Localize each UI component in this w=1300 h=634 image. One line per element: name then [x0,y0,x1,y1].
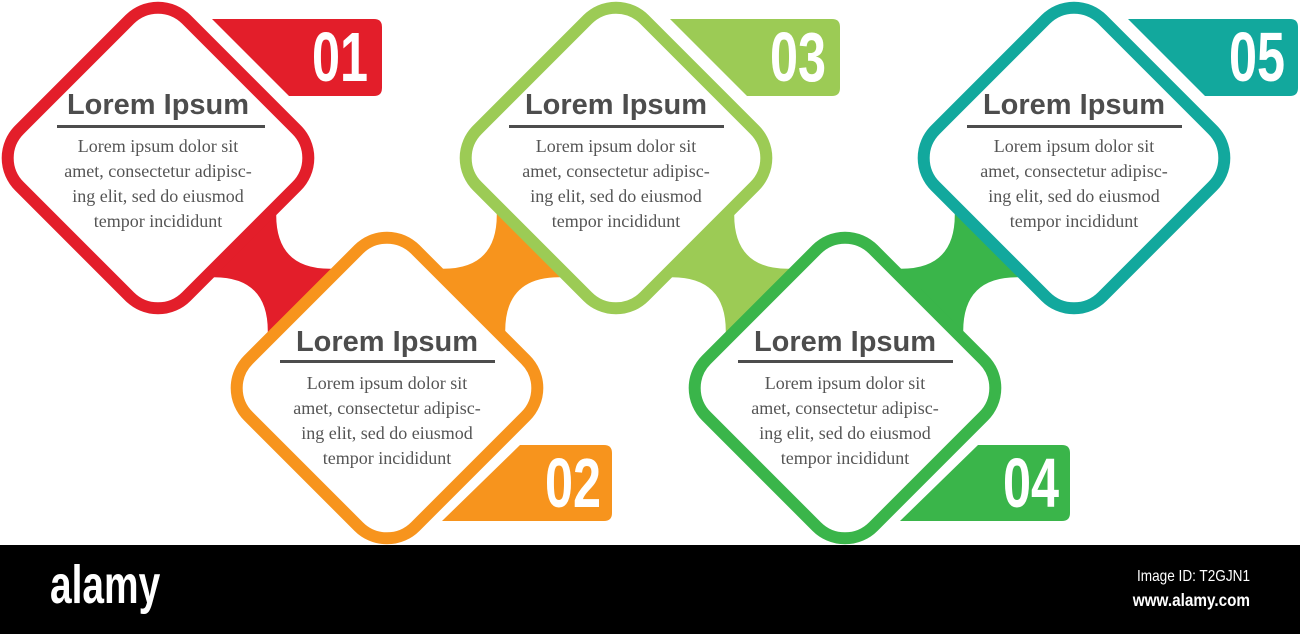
footer image id: Image ID: T2GJN1 [1137,568,1250,585]
diamond 1: Lorem ipsum dolor sit [78,136,238,156]
diamond 2: Lorem ipsum dolor sit [307,373,467,393]
diamond 4: ing elit, sed do eiusmod [759,423,931,443]
diamond 5 [907,0,1241,325]
tab 04: 04 [1003,444,1059,522]
diamond 5: amet, consectetur adipisc- [980,161,1168,181]
connector 4-5 [891,205,1027,341]
diamond 3: Lorem Ipsum [525,89,707,121]
diamond 2 [220,221,554,555]
diamond 4: Lorem ipsum dolor sit [765,373,925,393]
diamond 4: amet, consectetur adipisc- [751,398,939,418]
diamond 5: Lorem ipsum dolor sit [994,136,1154,156]
diamond 1: tempor incididunt [94,211,222,231]
footer url: www.alamy.com [1132,590,1250,610]
diamond 3: Lorem ipsum dolor sit [536,136,696,156]
diamond 5: Lorem Ipsum [983,89,1165,121]
diamond 4: Lorem Ipsum [754,326,936,358]
diamond 3 [449,0,783,325]
diamond 5: tempor incididunt [1010,211,1138,231]
diamond 3: amet, consectetur adipisc- [522,161,710,181]
tab 03: 03 [770,18,826,96]
tab 02 [442,444,612,522]
diamond 3: ing elit, sed do eiusmod [530,186,702,206]
tab 03 [670,18,840,96]
diamond 2: amet, consectetur adipisc- [293,398,481,418]
diamond 4 [678,221,1012,555]
connector 1-2 [204,205,340,341]
diamond 2: tempor incididunt [323,448,451,468]
diamond 2: Lorem Ipsum [296,326,478,358]
diamond 1: amet, consectetur adipisc- [64,161,252,181]
diamond 2: ing elit, sed do eiusmod [301,423,473,443]
tab 05 [1128,18,1298,96]
tab 02: 02 [545,444,601,522]
tab 01: 01 [312,18,368,96]
footer logo: alamy [50,554,160,614]
footer bar [0,545,1300,634]
tab 04 [900,444,1070,522]
diamond 3: tempor incididunt [552,211,680,231]
diamond 1 [0,0,325,325]
diamond 5: ing elit, sed do eiusmod [988,186,1160,206]
tab 01 [212,18,382,96]
tab 05: 05 [1229,18,1285,96]
diamond 4: tempor incididunt [781,448,909,468]
diamond 1: ing elit, sed do eiusmod [72,186,244,206]
diamond 1: Lorem Ipsum [67,89,249,121]
connector 3-4 [662,205,798,341]
connector 2-3 [433,205,569,341]
